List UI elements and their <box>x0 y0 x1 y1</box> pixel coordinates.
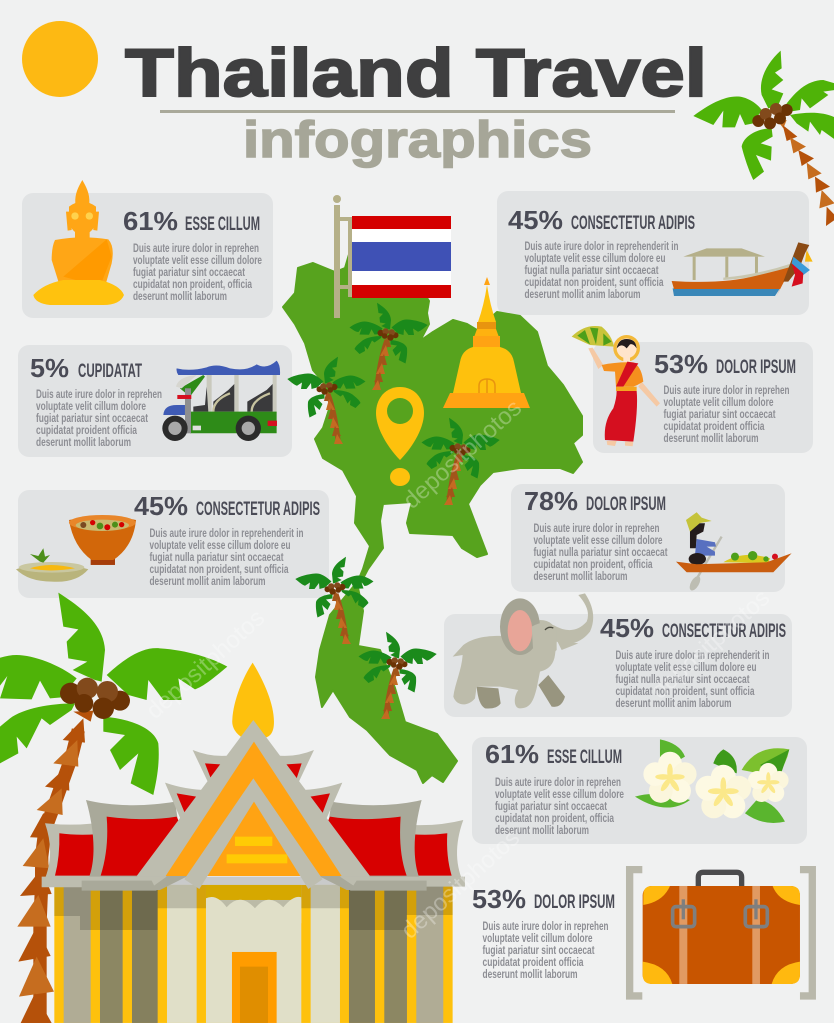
stupa <box>443 277 530 408</box>
panel: 61% esse cillum: deserunt mollit laborum <box>133 289 227 303</box>
panel: 78% dolor ipsum: DOLOR IPSUM <box>586 493 666 515</box>
panel: 61% esse cillum flowers: ESSE CILLUM <box>547 746 622 768</box>
panel: 45% consectetur adipis right: voluptate velit esse cillum dolore eu <box>524 251 666 265</box>
panel: 78% dolor ipsum <box>511 484 785 592</box>
panel: 61% esse cillum flowers <box>472 737 807 844</box>
panel: 5% cupidatat: voluptate velit cillum dolore <box>36 399 146 413</box>
panel: 61% esse cillum: fugiat pariatur sint occaecat <box>133 265 245 279</box>
panel: 45% consectetur adipis elephant: voluptate velit esse cillum dolore eu <box>616 660 756 674</box>
panel: 45% consectetur adipis elephant: fugiat nulla pariatur sint occaecat <box>616 672 750 686</box>
text block: 53% dolor ipsum suitcase <box>472 884 615 981</box>
panel: 45% consectetur adipis left: fugiat nulla pariatur sint occaecat <box>150 550 284 564</box>
icon: longtail boat <box>672 242 813 296</box>
panel: 53% dolor ipsum dancer: voluptate velit cillum dolore <box>664 395 774 409</box>
panel: 61% esse cillum flowers: deserunt mollit laborum <box>495 823 589 837</box>
watermarks <box>141 394 775 944</box>
panel: 61% esse cillum flowers: 61% <box>485 739 539 769</box>
text block: 53% dolor ipsum suitcase: Duis aute irure dolor in reprehen <box>482 919 608 933</box>
panel: 61% esse cillum flowers: voluptate velit esse cillum dolore <box>495 787 624 801</box>
icon: plumeria flowers <box>635 739 789 823</box>
panel: 61% esse cillum: ESSE CILLUM <box>185 213 260 235</box>
panel: 45% consectetur adipis elephant: 45% <box>600 613 654 643</box>
panel: 45% consectetur adipis right: cupidatat non proident, sunt officia <box>524 275 664 289</box>
panel: 5% cupidatat: Duis aute irure dolor in reprehen <box>36 387 162 401</box>
panel: 78% dolor ipsum: voluptate velit esse cillum dolore <box>534 533 663 547</box>
icon: tuk tuk <box>162 361 280 441</box>
icon: thai food bowl and plate <box>16 515 136 582</box>
map of Thailand <box>283 250 582 783</box>
panel: 5% cupidatat: cupidatat proident officia <box>36 423 137 437</box>
text block: 53% dolor ipsum suitcase: DOLOR IPSUM <box>534 891 615 913</box>
text block: 53% dolor ipsum suitcase: deserunt mollit laborum <box>482 967 578 981</box>
panel: 78% dolor ipsum: Duis aute irure dolor in reprehen <box>534 521 660 535</box>
palm tree top right <box>693 51 834 226</box>
palm tree on map 4 <box>295 557 374 644</box>
panel: 53% dolor ipsum dancer: fugiat pariatur sint occaecat <box>664 407 776 421</box>
panel: 45% consectetur adipis left: cupidatat non proident, sunt officia <box>150 562 289 576</box>
palm tree on map 2 <box>287 357 366 444</box>
watermarks: depositphotos <box>646 584 775 704</box>
panel: 53% dolor ipsum dancer <box>593 342 813 453</box>
panel: 78% dolor ipsum: 78% <box>524 486 578 516</box>
palm tree on map 1 <box>350 303 428 390</box>
panel: 78% dolor ipsum: cupidatat non proident, officia <box>534 557 653 571</box>
panel: 45% consectetur adipis right: fugiat nulla pariatur sint occaecat <box>524 263 658 277</box>
panel: 61% esse cillum: Duis aute irure dolor in reprehen <box>133 241 259 255</box>
icon: suitcase <box>630 870 812 996</box>
palm tree on map 5 <box>358 632 437 719</box>
panel: 61% esse cillum: cupidatat non proident, officia <box>133 277 252 291</box>
panel: 45% consectetur adipis left: CONSECTETUR ADIPIS <box>196 498 320 520</box>
text block: 53% dolor ipsum suitcase: 53% <box>472 884 526 914</box>
panel: 45% consectetur adipis left: deserunt mollit anim laborum <box>150 574 266 588</box>
panel: 5% cupidatat: CUPIDATAT <box>78 360 142 382</box>
panel: 5% cupidatat <box>18 345 292 457</box>
location pin <box>376 387 424 486</box>
subtitle: infographics <box>243 111 592 168</box>
panel: 45% consectetur adipis left: Duis aute irure dolor in reprehenderit in <box>150 526 304 540</box>
panel: 45% consectetur adipis right: 45% <box>508 205 563 235</box>
panel: 78% dolor ipsum: deserunt mollit laborum <box>534 569 628 583</box>
title divider <box>160 110 675 113</box>
panel: 45% consectetur adipis elephant: cupidatat non proident, sunt officia <box>616 684 755 698</box>
panel: 45% consectetur adipis right: deserunt mollit anim laborum <box>524 287 640 301</box>
panel: 61% esse cillum <box>22 193 273 318</box>
panel: 61% esse cillum flowers: Duis aute irure dolor in reprehen <box>495 775 621 789</box>
panel: 45% consectetur adipis left: 45% <box>134 491 188 521</box>
icon: elephant <box>453 593 593 708</box>
panel: 5% cupidatat: fugiat pariatur sint occaecat <box>36 411 148 425</box>
panel: 53% dolor ipsum dancer: deserunt mollit laborum <box>664 431 758 445</box>
panel: 61% esse cillum: voluptate velit esse cillum dolore <box>133 253 262 267</box>
panel: 45% consectetur adipis elephant: deserunt mollit anim laborum <box>616 696 732 710</box>
panel: 45% consectetur adipis left: voluptate velit esse cillum dolore eu <box>150 538 290 552</box>
large palm tree <box>0 593 227 1023</box>
icon: floating market vendor <box>676 512 792 592</box>
panel: 61% esse cillum flowers: cupidatat non proident, officia <box>495 811 614 825</box>
icon: thai dancer with fan <box>572 326 660 446</box>
panel: 45% consectetur adipis left <box>18 490 329 598</box>
panel: 45% consectetur adipis right <box>497 191 809 315</box>
text block: 53% dolor ipsum suitcase: voluptate velit cillum dolore <box>482 931 593 945</box>
watermarks: depositphotos <box>141 604 270 724</box>
icon: golden buddha <box>33 180 124 305</box>
title: Thailand Travel <box>125 35 707 111</box>
panel: 78% dolor ipsum: fugiat nulla pariatur sint occaecat <box>534 545 668 559</box>
panel: 53% dolor ipsum dancer: 53% <box>654 349 708 379</box>
panel: 61% esse cillum flowers: fugiat pariatur sint occaecat <box>495 799 607 813</box>
panel: 61% esse cillum: 61% <box>123 206 178 236</box>
palm tree on map 3 <box>422 418 500 505</box>
panel: 45% consectetur adipis right: Duis aute irure dolor in reprehenderit in <box>524 239 678 253</box>
panel: 45% consectetur adipis elephant <box>444 613 792 717</box>
text block: 53% dolor ipsum suitcase: cupidatat proident officia <box>482 955 584 969</box>
panel: 5% cupidatat: deserunt mollit laborum <box>36 435 131 449</box>
temple <box>42 663 465 1023</box>
sun <box>22 21 98 97</box>
panel: 5% cupidatat: 5% <box>30 353 69 383</box>
panel: 45% consectetur adipis right: CONSECTETUR ADIPIS <box>571 212 695 234</box>
watermarks: depositphotos <box>396 824 525 944</box>
watermarks: depositphotos <box>398 394 527 514</box>
text block: 53% dolor ipsum suitcase: fugiat pariatur sint occaecat <box>482 943 594 957</box>
panel: 53% dolor ipsum dancer: cupidatat proident officia <box>664 419 765 433</box>
flag of Thailand <box>333 195 451 318</box>
